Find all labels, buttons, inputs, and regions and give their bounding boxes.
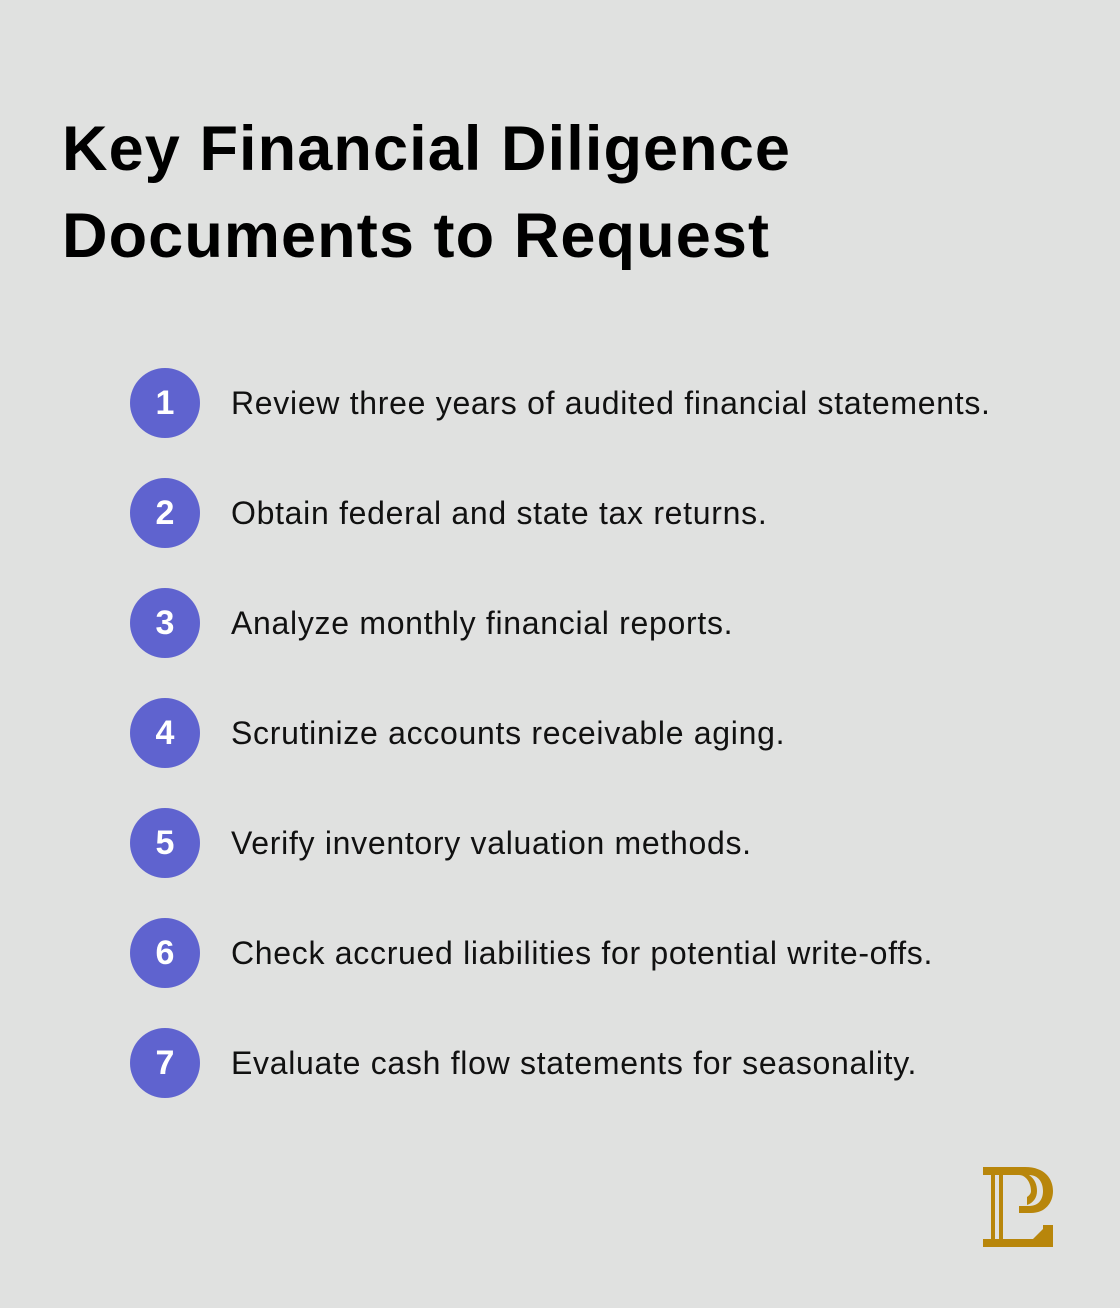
item 7: Evaluate cash flow statements for seasonality. <box>231 1045 917 1081</box>
item 7: 7 <box>156 1044 174 1082</box>
item 4: Scrutinize accounts receivable aging. <box>231 715 785 751</box>
title: Documents to Request <box>62 201 770 271</box>
item 5: Verify inventory valuation methods. <box>231 825 752 861</box>
item 3: 3 <box>156 604 174 642</box>
item 5: 5 <box>156 824 174 862</box>
item 4 <box>130 698 785 768</box>
item 6: 6 <box>156 934 174 972</box>
item 4: 4 <box>156 714 174 752</box>
title: Key Financial Diligence <box>62 114 791 184</box>
logo <box>983 1167 1053 1247</box>
item 3: Analyze monthly financial reports. <box>231 605 733 641</box>
item 2: 2 <box>156 494 174 532</box>
item 1 <box>130 368 991 438</box>
item 1: Review three years of audited financial statements. <box>231 385 991 421</box>
item 7 <box>130 1028 917 1098</box>
item 5 <box>130 808 752 878</box>
item 6 <box>130 918 933 988</box>
item 2: Obtain federal and state tax returns. <box>231 495 767 531</box>
item 3 <box>130 588 733 658</box>
item 6: Check accrued liabilities for potential write-offs. <box>231 935 933 971</box>
item 1: 1 <box>156 384 174 422</box>
title <box>62 114 791 271</box>
item 2 <box>130 478 767 548</box>
